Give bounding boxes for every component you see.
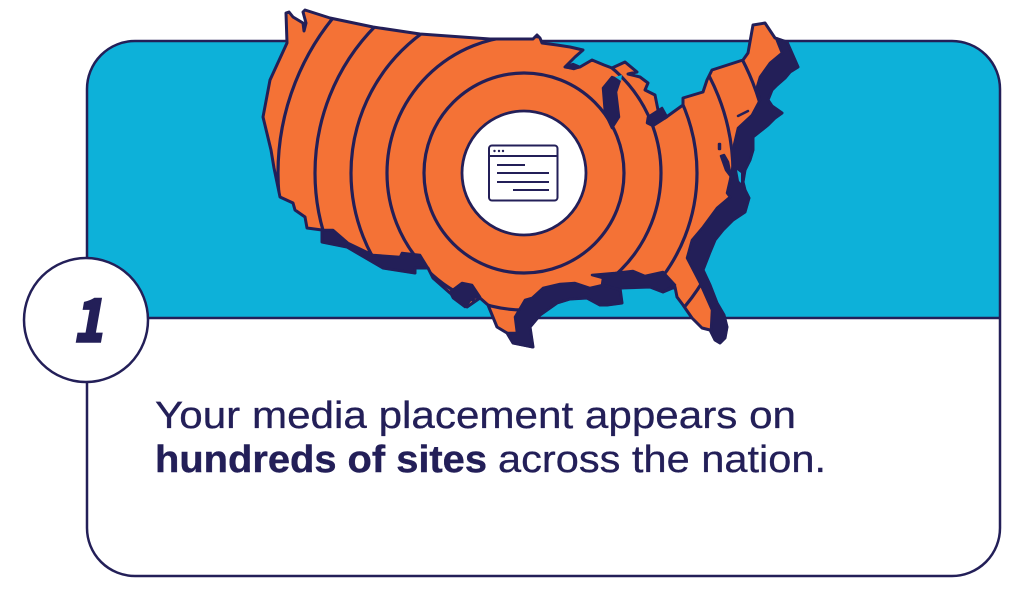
map silhouette [263, 10, 798, 347]
text line 2 continued: across the nation. [498, 439, 826, 481]
lake erie [647, 108, 667, 126]
east coast shadow [687, 38, 798, 343]
chesapeake inlet [719, 144, 720, 149]
lake superior shore [565, 64, 580, 69]
band divider [87, 317, 1000, 319]
text line 2: hundreds of sites [155, 439, 487, 481]
long island [738, 111, 748, 116]
center circle with browser icon [462, 111, 586, 235]
gulf coast shadow: louisiana and texas [507, 283, 622, 347]
mexico border shadow [322, 230, 428, 273]
icon: browser window [489, 146, 558, 200]
number badge [24, 258, 148, 382]
dark coastline shading [322, 38, 798, 347]
lake michigan [603, 77, 620, 128]
map of the United States with signal rings [262, 8, 800, 348]
signal rings [276, 20, 759, 312]
body text [155, 395, 826, 481]
chesapeake bay [721, 155, 733, 178]
small lake gap [615, 75, 622, 81]
step number: 1 [69, 274, 116, 360]
gulf coast shadow: florida panhandle [592, 271, 675, 292]
card outline [87, 41, 1000, 576]
delaware bay gap [737, 170, 741, 183]
blue header band [87, 41, 1000, 318]
text line 1: Your media placement appears on [155, 395, 796, 437]
big bend shadow [450, 283, 480, 307]
panel: card [87, 41, 1000, 576]
